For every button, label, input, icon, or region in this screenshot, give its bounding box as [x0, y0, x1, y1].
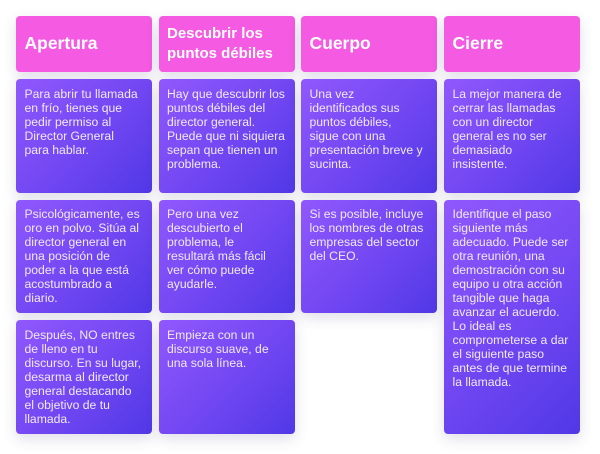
card: abrir la llamada — [16, 79, 152, 192]
card: psicológicamente: poder a la que está — [24, 263, 129, 277]
card: ver cómo ayudarle: descubierto el — [167, 221, 243, 235]
card: no entres de lleno: discurso. En su lugar, — [24, 356, 141, 370]
card: psicológicamente: una posición de — [24, 249, 110, 263]
card: cerrar las llamadas: cerrar las llamadas — [452, 100, 555, 114]
card: descubrir puntos débiles: director general. — [167, 114, 255, 128]
card: paso siguiente: Lo ideal es — [452, 319, 511, 333]
card: discurso suave: una sola línea. — [167, 356, 246, 370]
card: descubrir puntos débiles: problema. — [167, 156, 221, 170]
card: presentación breve: sucinta. — [310, 156, 352, 170]
card: ver cómo ayudarle — [158, 200, 294, 313]
card: discurso suave: Empieza con un — [167, 328, 254, 342]
card: nombres de empresas — [301, 200, 437, 313]
card: nombres de empresas: los nombres de otras — [310, 221, 423, 235]
header: Apertura — [16, 16, 152, 72]
header: Descubrir los puntos débiles: puntos débiles — [167, 44, 273, 62]
card: discurso suave — [158, 320, 294, 434]
card: cerrar las llamadas: La mejor manera de — [452, 86, 562, 100]
card: presentación breve: sigue con una — [310, 128, 385, 142]
header: Descubrir los puntos débiles: Descubrir los — [167, 24, 263, 42]
card: descubrir puntos débiles — [158, 79, 294, 192]
card: paso siguiente: demostración con su — [452, 263, 565, 277]
card: nombres de empresas: empresas del sector — [310, 235, 419, 249]
card: paso siguiente: equipo u otra acción — [452, 277, 562, 291]
header: Cuerpo — [301, 16, 437, 72]
card: presentación breve: puntos débiles, — [310, 114, 392, 128]
card: no entres de lleno: llamada. — [24, 412, 71, 426]
header: Cierre — [444, 16, 580, 72]
card: no entres de lleno: Después, NO entres — [24, 328, 135, 342]
card: paso siguiente: comprometerse a dar — [452, 333, 568, 347]
card: abrir la llamada: pedir permiso al — [24, 114, 111, 128]
card: cerrar las llamadas — [444, 79, 580, 192]
card: no entres de lleno: el objetivo de tu — [24, 398, 110, 412]
card: psicológicamente: director general en — [24, 235, 126, 249]
card: nombres de empresas: Si es posible, incluye — [310, 207, 423, 221]
card: paso siguiente: el siguiente paso — [452, 347, 544, 361]
card: paso siguiente: la llamada. — [452, 375, 511, 389]
card: ver cómo ayudarle: Pero una vez — [167, 207, 239, 221]
card: paso siguiente: adecuado. Puede ser — [452, 235, 568, 249]
card: psicológicamente: Psicológicamente, es — [24, 207, 140, 221]
card: paso siguiente: antes de que termine — [452, 361, 567, 375]
card: no entres de lleno: desarma al director — [24, 370, 129, 384]
card: presentación breve: presentación breve y — [310, 142, 423, 156]
card: discurso suave: discurso suave, de — [167, 342, 269, 356]
header: Cierre: Cierre — [452, 33, 503, 53]
card: no entres de lleno: general destacando — [24, 384, 132, 398]
header: Cuerpo: Cuerpo — [310, 33, 371, 53]
card: paso siguiente — [444, 200, 580, 434]
card: abrir la llamada: en frío, tienes que — [24, 100, 122, 114]
card: cerrar las llamadas: demasiado — [452, 142, 512, 156]
card: presentación breve — [301, 79, 437, 192]
card: psicológicamente: diario. — [24, 291, 58, 305]
header: Apertura: Apertura — [24, 33, 97, 53]
card: ver cómo ayudarle: ayudarle. — [167, 277, 217, 291]
card: paso siguiente: otra reunión, una — [452, 249, 545, 263]
card: descubrir puntos débiles: Puede que ni siquiera — [167, 128, 285, 142]
card: no entres de lleno: de lleno en tu — [24, 342, 98, 356]
card: presentación breve: identificados sus — [310, 100, 400, 114]
card: ver cómo ayudarle: resultará más fácil — [167, 249, 266, 263]
card: cerrar las llamadas: con un director — [452, 114, 533, 128]
card: paso siguiente: Identifique el paso — [452, 207, 551, 221]
card: abrir la llamada: Director General — [24, 128, 114, 142]
card: abrir la llamada: para hablar. — [24, 142, 89, 156]
card: psicológicamente: oro en polvo. Sitúa al — [24, 221, 139, 235]
card: descubrir puntos débiles: Hay que descubrir los — [167, 86, 285, 100]
card: cerrar las llamadas: insistente. — [452, 156, 507, 170]
card: paso siguiente: avanzar el acuerdo. — [452, 305, 560, 319]
card: psicológicamente — [16, 200, 152, 313]
card: paso siguiente: siguiente más — [452, 221, 528, 235]
card: ver cómo ayudarle: problema, le — [167, 235, 234, 249]
card: cerrar las llamadas: general es no ser — [452, 128, 547, 142]
header: Descubrir los puntos débiles — [158, 16, 294, 72]
card: psicológicamente: acostumbrado a — [24, 277, 112, 291]
card: descubrir puntos débiles: sepan que tienen un — [167, 142, 277, 156]
card: no entres de lleno — [16, 320, 152, 434]
card: abrir la llamada: Para abrir tu llamada — [24, 86, 138, 100]
card: ver cómo ayudarle: ver cómo puede — [167, 263, 254, 277]
card: nombres de empresas: del CEO. — [310, 249, 359, 263]
card: descubrir puntos débiles: puntos débiles del — [167, 100, 265, 114]
card: paso siguiente: tangible que haga — [452, 291, 549, 305]
card: presentación breve: Una vez — [310, 86, 354, 100]
